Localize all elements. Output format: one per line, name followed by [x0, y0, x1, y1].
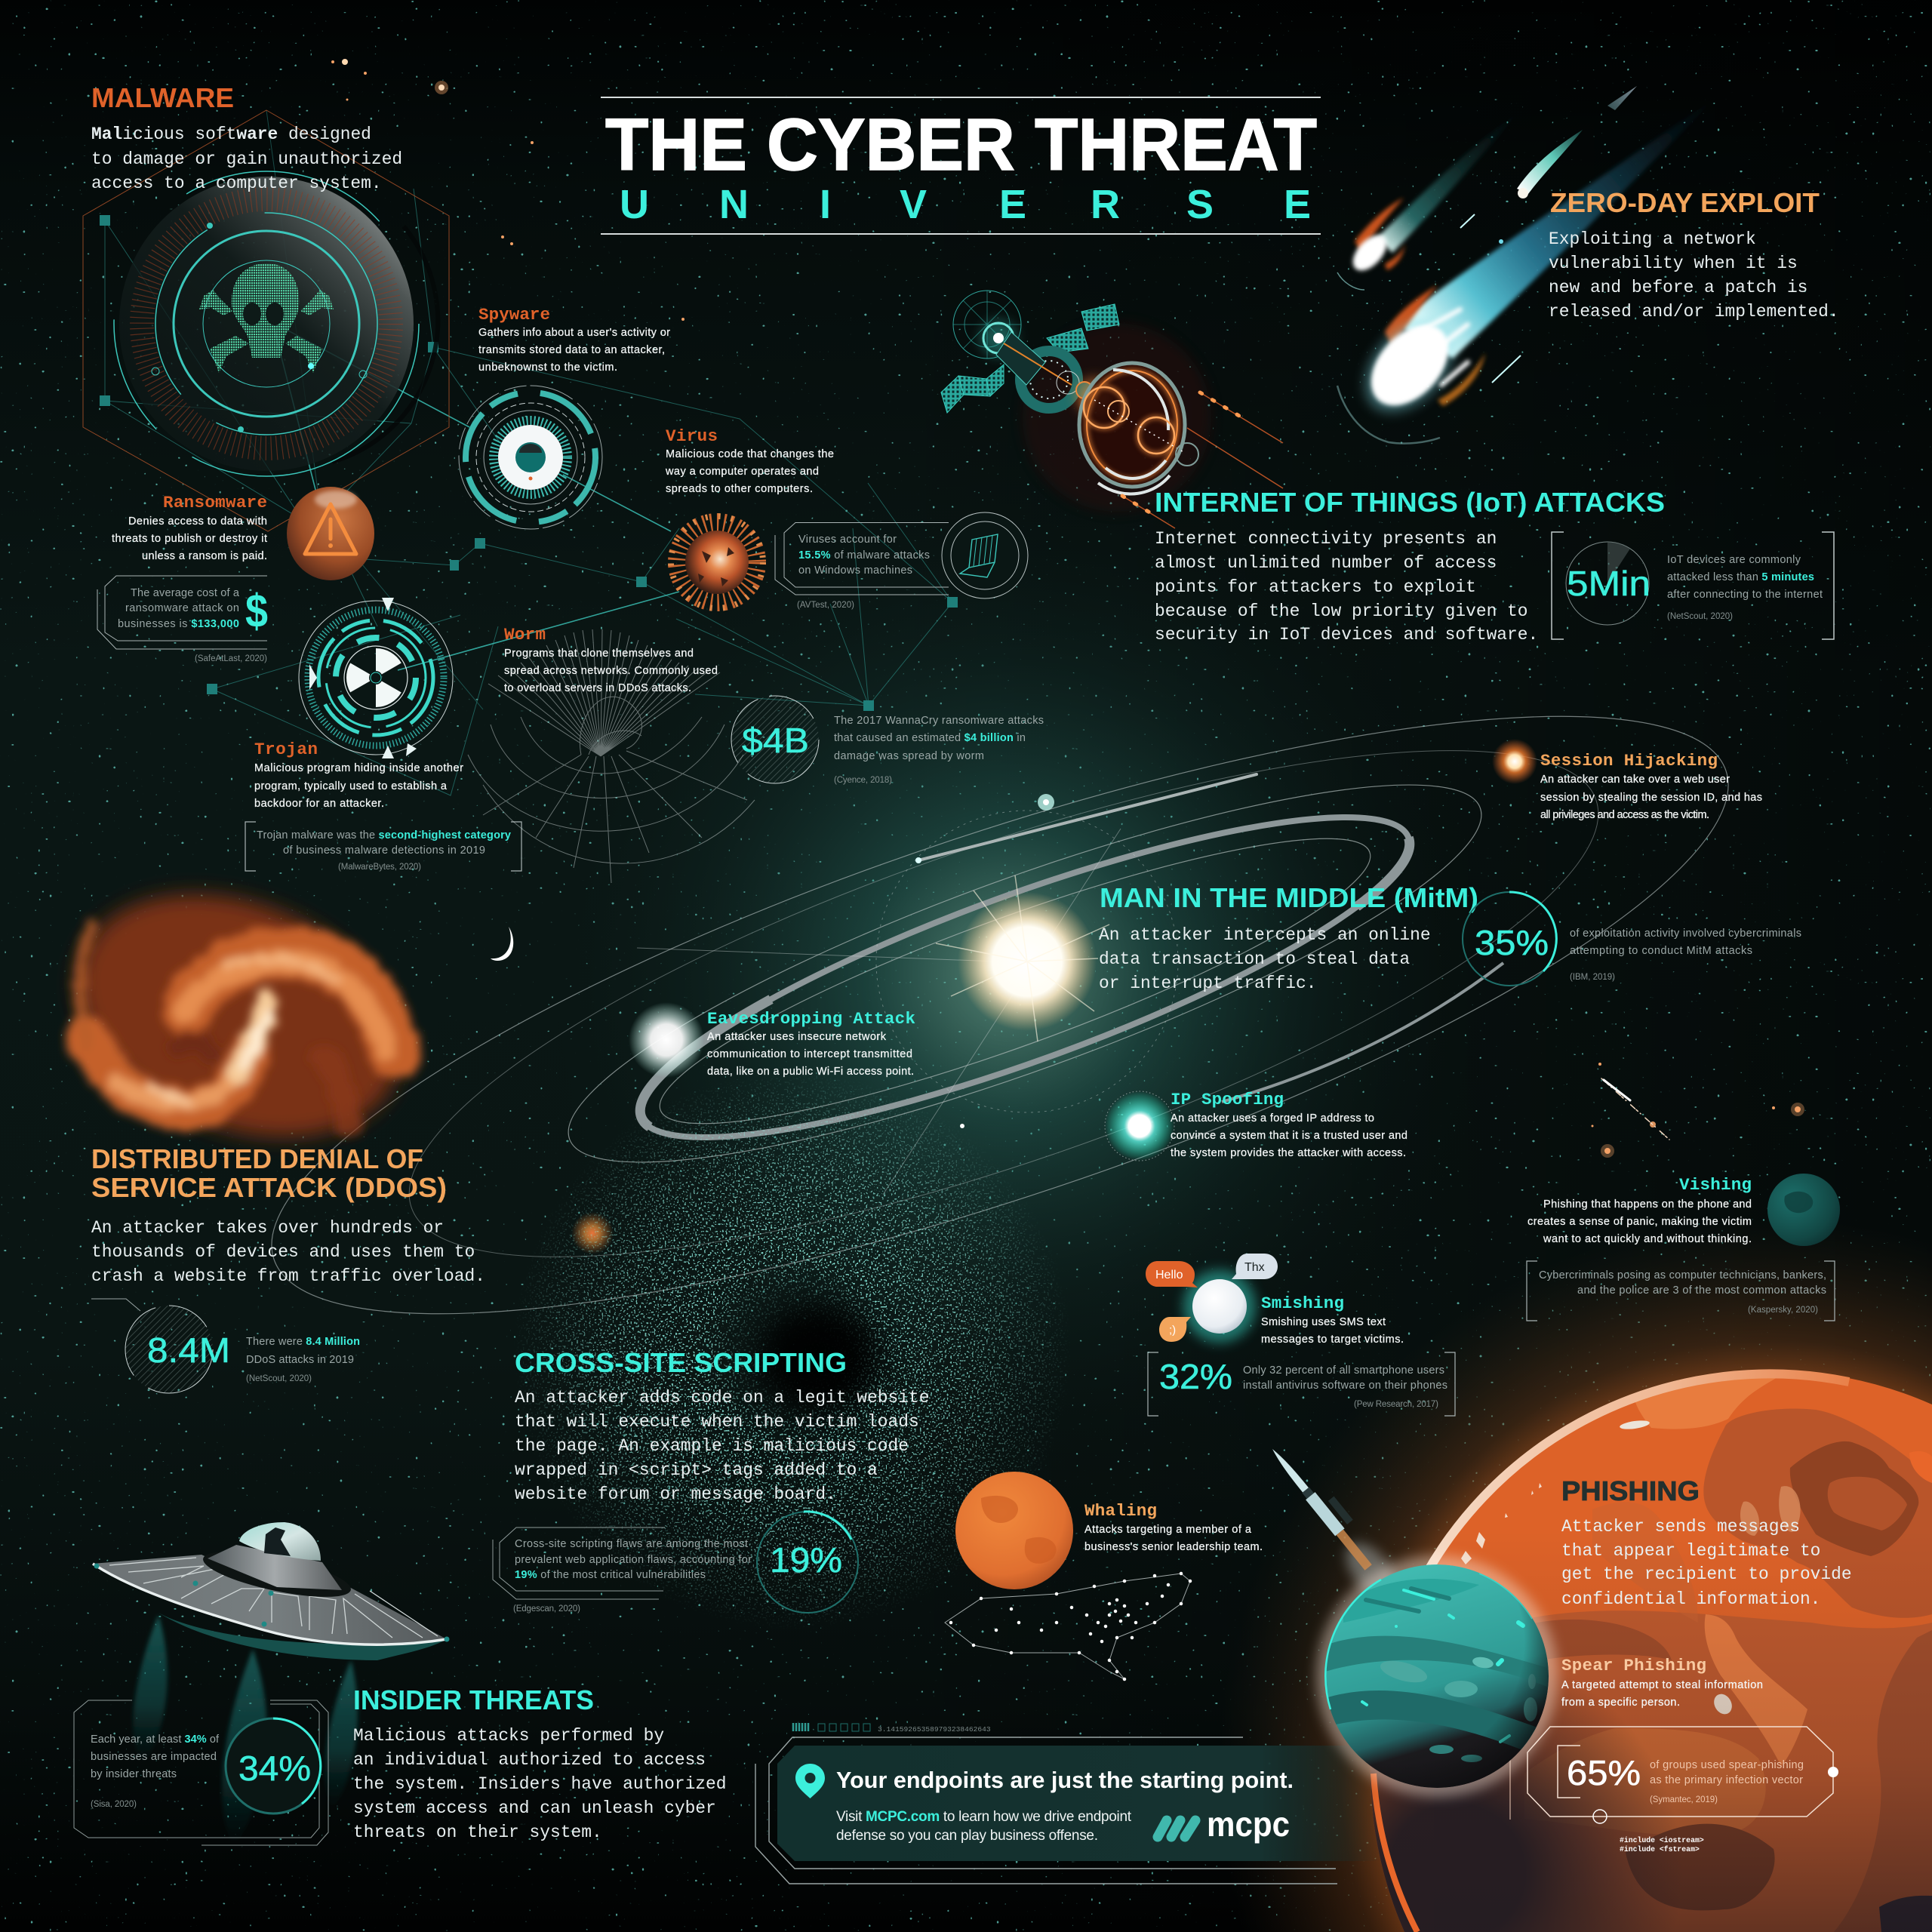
text block: security in IoT devices and software. [1155, 625, 1538, 645]
orbit system [216, 599, 1784, 1431]
logo: mcpc [1207, 1804, 1290, 1844]
text block: An attacker uses a forged IP address to [1171, 1112, 1374, 1124]
stat callout: ransomware cost: The average cost of a [131, 587, 240, 599]
subheading: Spear Phishing [1561, 1656, 1706, 1675]
text block: data, like on a public Wi-Fi access point. [707, 1066, 914, 1078]
text block: Smishing uses SMS text [1261, 1316, 1386, 1328]
stat callout: viruses: 15.5% of malware attacks [798, 549, 930, 561]
text block: vulnerability when it is [1549, 254, 1798, 273]
text block [515, 1388, 929, 1504]
stat text: (NetScout, 2020) [246, 1374, 312, 1383]
decorative small stars and moon [491, 794, 1669, 1254]
text block: Programs that clone themselves and [504, 648, 694, 660]
text block: points for attackers to exploit [1155, 577, 1476, 597]
text block [91, 125, 402, 193]
text block: thousands of devices and uses them to [91, 1242, 475, 1262]
icon: speech bubbles and orb [1146, 1254, 1278, 1343]
text block: session by stealing the session ID, and has [1540, 792, 1762, 804]
panel: title [601, 97, 1321, 234]
stat text: attempting to conduct MitM attacks [1570, 945, 1752, 957]
stat text: of exploitation activity involved cybercriminals [1570, 928, 1801, 940]
text block: communication to intercept transmitted [707, 1048, 912, 1060]
panel: internet of things [941, 291, 1834, 645]
icon: cyan star [1105, 1091, 1174, 1161]
text block: get the recipient to provide [1561, 1564, 1852, 1584]
stat callout: ransomware cost: businesses is $133,000 [118, 618, 239, 630]
text block: Phishing that happens on the phone and [1543, 1198, 1752, 1211]
text block: Denies access to data with [128, 515, 267, 528]
icon: laptop [942, 512, 1028, 598]
icon: wormhole [468, 629, 755, 883]
text block: website forum or message board. [515, 1484, 836, 1504]
text block: unless a ransom is paid. [142, 550, 267, 562]
stat callout: iot: attacked less than 5 minutes [1667, 571, 1814, 583]
icon: speech bubbles and orb: ;) [1169, 1324, 1176, 1337]
stat callout: iot: after connecting to the internet [1667, 589, 1823, 601]
text block: that appear legitimate to [1561, 1541, 1820, 1561]
stat callout: smishing [1148, 1352, 1455, 1416]
stat callout: insider: Each year, at least 34% of [91, 1734, 220, 1746]
stat callout: xss [493, 1527, 752, 1614]
decorative orange stars [331, 59, 1804, 1158]
text block [1549, 229, 1839, 321]
stat circle: $4B [742, 721, 809, 760]
text block: Malicious software designed [91, 125, 371, 144]
icon: speech bubbles and orb: Thx [1244, 1261, 1265, 1274]
stat text: (Cyence, 2018) [834, 776, 892, 785]
heading: Worm [504, 625, 546, 645]
stat text: DDoS attacks in 2019 [246, 1354, 354, 1366]
text block: confidential information. [1561, 1589, 1820, 1609]
decorative progress bar [793, 1723, 991, 1734]
stat callout: vishing: Cybercriminals posing as computer technicians, bankers, [1539, 1269, 1826, 1281]
stat callout: smishing: install antivirus software on their phones [1243, 1380, 1447, 1392]
heading: Eavesdropping Attack [707, 1009, 915, 1029]
panel: session hijacking [1492, 739, 1762, 821]
text block: convince a system that it is a trusted user and [1171, 1130, 1407, 1142]
planet [1316, 1555, 1558, 1797]
text block [707, 1031, 914, 1078]
panel: virus [665, 426, 1028, 610]
icon: dark teal planet [1767, 1174, 1840, 1246]
stat circle: 19% [770, 1540, 842, 1580]
text block: spreads to other computers. [666, 483, 813, 495]
stat callout: smishing: 32% [1159, 1357, 1232, 1396]
rocket [1258, 1438, 1408, 1611]
stat callout: trojan: (MalwareBytes, 2020) [338, 863, 421, 872]
heading: CROSS-SITE SCRIPTING [515, 1347, 847, 1378]
text block: business's senior leadership team. [1084, 1541, 1263, 1553]
stat callout: xss: Cross-site scripting flaws are among the most [515, 1538, 748, 1550]
text block [1084, 1524, 1263, 1553]
stat callout: trojan: of business malware detections in 2019 [283, 844, 485, 857]
text block: An attacker takes over hundreds or [91, 1218, 444, 1238]
heading: Spyware [478, 305, 550, 325]
stat callout: vishing: (Kaspersky, 2020) [1748, 1306, 1818, 1315]
text block [504, 648, 718, 694]
illustration: orange planet [1358, 1358, 1932, 1932]
code snippet: #include <fstream> [1620, 1845, 1700, 1854]
stat circle [226, 1718, 321, 1814]
text block: to overload servers in DDoS attacks. [504, 682, 691, 694]
panel: vishing [1527, 1174, 1840, 1321]
text block: Exploiting a network [1549, 229, 1756, 249]
heading: IP Spoofing [1171, 1090, 1284, 1109]
network bright links [272, 322, 679, 670]
illustration: satellite [941, 291, 1283, 528]
stat callout: viruses: Viruses account for [798, 534, 897, 546]
logo [1158, 1804, 1290, 1844]
text block: spread across networks. Commonly used [504, 665, 718, 677]
text block: that will execute when the victim loads [515, 1412, 919, 1432]
heading: Whaling [1084, 1501, 1157, 1521]
heading: SERVICE ATTACK (DDOS) [91, 1172, 447, 1203]
stat text: The 2017 WannaCry ransomware attacks [834, 715, 1044, 727]
stat callout: spear phishing [1510, 1727, 1838, 1823]
text block: unbeknownst to the victim. [478, 361, 617, 374]
network lines [105, 110, 952, 795]
panel: zero-day exploit [1337, 86, 1839, 444]
text block: Attacks targeting a member of a [1084, 1524, 1252, 1536]
stat callout: spear phishing: of groups used spear-phishing [1650, 1759, 1804, 1771]
text block: backdoor for an attacker. [254, 798, 384, 810]
heading: Session Hijacking [1540, 751, 1718, 771]
stat text: damage was spread by worm [834, 750, 984, 762]
stat circle: 8.4M [147, 1331, 230, 1370]
text block: data transaction to steal data [1099, 949, 1410, 969]
heading: Ransomware [163, 493, 267, 512]
panel: spyware [459, 305, 670, 529]
text block [254, 762, 463, 810]
stat callout: viruses: (AVTest, 2020) [797, 601, 854, 610]
heading: Trojan [254, 740, 318, 759]
panel: ip spoofing [1105, 1090, 1407, 1161]
text block [1540, 774, 1762, 821]
banner [777, 1746, 1381, 1861]
icon: whale constellation [945, 1574, 1190, 1679]
stat callout: iot: IoT devices are commonly [1667, 554, 1801, 566]
panel: cross-site scripting [492, 1078, 1066, 1624]
stat callout: ransomware cost: $ [245, 586, 268, 638]
panel: ddos [42, 850, 485, 1393]
text block: messages to target victims. [1261, 1334, 1404, 1346]
stat callout: xss: prevalent web application flaws, accounting for [515, 1554, 752, 1566]
stat callout: smishing: Only 32 percent of all smartphone users [1243, 1364, 1444, 1377]
text block: Malicious program hiding inside another [254, 762, 463, 774]
text block [353, 1726, 727, 1842]
text block [91, 1218, 485, 1286]
panel: eavesdropping [629, 1002, 915, 1078]
text block [1171, 1112, 1407, 1159]
headline: Your endpoints are just the starting point. [836, 1767, 1294, 1793]
text block: the system provides the attacker with access. [1171, 1147, 1406, 1159]
text block: Malicious attacks performed by [353, 1726, 664, 1746]
text block: crash a website from traffic overload. [91, 1266, 485, 1286]
text block [112, 515, 267, 562]
stat callout: insider: businesses are impacted [91, 1751, 217, 1763]
text block: to damage or gain unauthorized [91, 149, 402, 169]
planet rim [1411, 1374, 1849, 1603]
stat callout: ransomware cost: (SafeAtLast, 2020) [195, 654, 267, 663]
stat callout: viruses [775, 522, 949, 610]
text block: An attacker adds code on a legit website [515, 1388, 929, 1407]
text block: want to act quickly and without thinking. [1543, 1233, 1752, 1245]
panel: man in the middle [936, 875, 1801, 1041]
text block: Internet connectivity presents an [1155, 529, 1497, 549]
text block: creates a sense of panic, making the victim [1527, 1216, 1752, 1228]
text block [665, 448, 834, 495]
stat callout: xss: (Edgescan, 2020) [513, 1604, 580, 1614]
icon: skull sphere [114, 171, 438, 476]
stat text [834, 715, 1044, 785]
text block: or interrupt traffic. [1099, 974, 1316, 993]
text block [478, 327, 670, 374]
text block: the page. An example is malicious code [515, 1436, 909, 1456]
hexagon frame [83, 110, 449, 531]
sub text block [1561, 1679, 1763, 1709]
text block: defense so you can play business offense. [836, 1828, 1098, 1844]
panel: trojan [245, 598, 521, 872]
text block [1527, 1198, 1752, 1245]
heading: INSIDER THREATS [353, 1684, 594, 1715]
code snippet: #include <iostream> [1620, 1836, 1704, 1844]
icon: orange star [1492, 739, 1537, 784]
text block: system access and can unleash cyber [353, 1798, 716, 1818]
network nodes [100, 215, 958, 711]
text block: An attacker uses insecure network [707, 1031, 887, 1043]
panel: smishing [1146, 1254, 1455, 1416]
panel: whaling [945, 1472, 1263, 1679]
text block [1561, 1517, 1852, 1609]
heading: MAN IN THE MIDDLE (MitM) [1100, 882, 1478, 913]
stat circle [731, 696, 819, 783]
stat text: that caused an estimated $4 billion in [834, 732, 1026, 744]
stat circle: 34% [238, 1749, 311, 1788]
text block: an individual authorized to access [353, 1750, 706, 1770]
heading: Virus [666, 426, 718, 446]
text block: way a computer operates and [665, 466, 819, 478]
illustration: comets [1337, 86, 1717, 444]
text block: threats on their system. [353, 1823, 602, 1842]
stat circle [1463, 892, 1556, 986]
stat callout: xss: 19% of the most critical vulnerabilities [515, 1569, 706, 1581]
stat callout: insider [74, 1700, 328, 1845]
icon: sun [936, 875, 1109, 1041]
text block: almost unlimited number of access [1155, 553, 1497, 573]
heading: DISTRIBUTED DENIAL OF [91, 1143, 423, 1174]
panel: insider threats [74, 1522, 727, 1849]
stat circle [91, 1299, 230, 1393]
illustration: galaxy [42, 850, 436, 1182]
text block: because of the low priority given to [1155, 601, 1528, 621]
heading: ZERO-DAY EXPLOIT [1550, 187, 1820, 218]
text block: new and before a patch is [1549, 278, 1807, 297]
sub text block: from a specific person. [1561, 1697, 1680, 1709]
heading [91, 1143, 447, 1203]
stat callout: spear phishing: (Symantec, 2019) [1650, 1795, 1718, 1804]
sub text block: A targeted attempt to steal information [1561, 1679, 1763, 1691]
text block: transmits stored data to an attacker, [478, 344, 665, 356]
stat circle: 35% [1475, 923, 1549, 962]
icon: small orange planet [955, 1472, 1073, 1589]
text block: all privileges and access as the victim. [1540, 809, 1709, 821]
stat callout: ransomware cost [97, 576, 268, 663]
heading: Smishing [1261, 1294, 1344, 1313]
panel: phishing planet [1358, 1358, 1932, 1932]
stat callout: spear phishing: as the primary infection vector [1650, 1774, 1803, 1786]
stat callout: iot: 5Min [1567, 564, 1651, 603]
planet lower rim [1374, 1774, 1417, 1932]
stat text: There were 8.4 Million [246, 1336, 360, 1348]
subtitle: UNIVERSE [620, 182, 1311, 227]
heading: MALWARE [91, 82, 234, 113]
icon: white star [629, 1002, 704, 1078]
icon: radiation dial [299, 598, 453, 758]
text block: An attacker intercepts an online [1099, 925, 1431, 945]
title text: THE CYBER THREAT [605, 103, 1317, 186]
stat text [246, 1336, 360, 1383]
stat callout: iot [1552, 532, 1834, 639]
text block: Gathers info about a user's activity or [478, 327, 670, 339]
icon: warning orb [287, 487, 374, 580]
stat text: (IBM, 2019) [1570, 973, 1615, 982]
stat text [1570, 928, 1801, 982]
text block [1155, 529, 1538, 645]
icon: virus [671, 516, 763, 608]
text block: threats to publish or destroy it [112, 533, 267, 545]
panel: call to action [755, 1723, 1381, 1884]
text block [836, 1809, 1132, 1844]
stat callout: insider: by insider threats [91, 1768, 177, 1780]
illustration: black hole star cloud [519, 1078, 1066, 1624]
heading: INTERNET OF THINGS (IoT) ATTACKS [1155, 487, 1665, 518]
icon: speech bubbles and orb: Hello [1155, 1269, 1183, 1281]
stat callout: insider: (Sisa, 2020) [91, 1800, 137, 1809]
code snippet [1620, 1836, 1704, 1854]
text block: An attacker can take over a web user [1540, 774, 1730, 786]
text block: access to a computer system. [91, 174, 382, 193]
text block: the system. Insiders have authorized [353, 1774, 727, 1794]
text block: Visit MCPC.com to learn how we drive endpoint [836, 1809, 1132, 1825]
panel: worm [468, 625, 1044, 883]
stat callout: trojan: Trojan malware was the second-highest category [257, 829, 511, 841]
panel: malware [83, 82, 449, 531]
text block [1261, 1316, 1404, 1346]
illustration: ufo [93, 1522, 447, 1849]
stat callout: trojan [245, 822, 521, 872]
frame lines [755, 1737, 1337, 1884]
stat callout: iot: (NetScout, 2020) [1667, 612, 1733, 621]
text block: wrapped in <script> tags added to a [515, 1460, 878, 1480]
icon: location pin [795, 1764, 825, 1798]
panel: ransomware [97, 487, 374, 663]
text block: released and/or implemented. [1549, 302, 1839, 321]
stat callout: vishing [1527, 1261, 1835, 1321]
text block: Attacker sends messages [1561, 1517, 1800, 1537]
stat callout: ransomware cost: ransomware attack on [125, 602, 239, 614]
text block: Malicious code that changes the [666, 448, 834, 460]
icon: eye [459, 386, 602, 529]
decorative progress bar: 3.141592653589793238462643 [878, 1725, 991, 1734]
stat callout: viruses: on Windows machines [798, 565, 912, 577]
text block [1099, 925, 1431, 993]
heading: Vishing [1679, 1175, 1752, 1195]
stat callout: smishing: (Pew Research, 2017) [1354, 1400, 1438, 1409]
heading: PHISHING [1561, 1475, 1700, 1506]
stat circle [757, 1512, 858, 1613]
text block: program, typically used to establish a [254, 780, 448, 792]
stat callout: vishing: and the police are 3 of the most common attacks [1577, 1284, 1826, 1297]
stat callout: spear phishing: 65% [1567, 1753, 1641, 1792]
illustration: rocket and teal planet [1258, 1438, 1558, 1797]
